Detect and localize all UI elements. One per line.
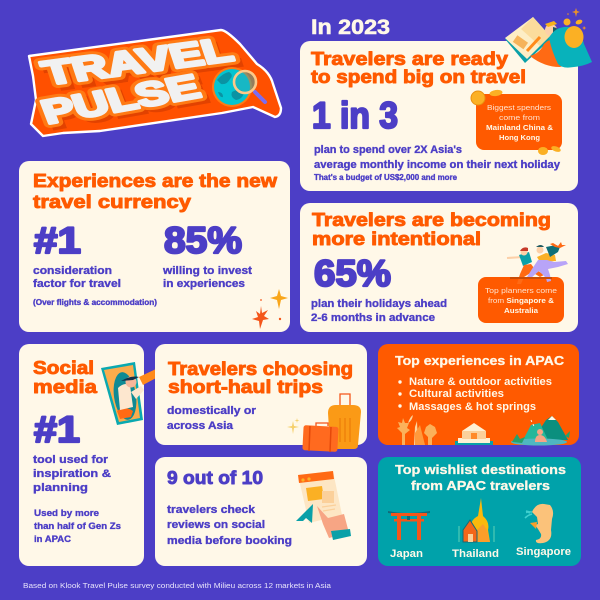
- text: domestically: domestically or: [167, 405, 257, 417]
- heading: short-haul: [168, 358, 353, 397]
- panel: social media: [19, 344, 144, 566]
- logo: Travel Pulse: PULSE: [36, 68, 205, 132]
- text: Gen Z usage: in APAC: [34, 534, 71, 545]
- heading: intentional: more intentional: [312, 228, 481, 249]
- heading: social media: Social: [33, 357, 94, 378]
- callout: biggest spenders: Hong Kong: [499, 133, 540, 142]
- footer source note: Based on Klook Travel Pulse survey conducted with Milieu across 12 markets in Asia: [23, 583, 331, 590]
- list: experiences: Cultural activities: [409, 388, 504, 400]
- panel: short-haul trips: [155, 344, 367, 452]
- heading: social media: [33, 357, 98, 397]
- panel: experiences: [19, 161, 290, 332]
- illustration: running travelers: [507, 242, 568, 284]
- callout: top planners: Australia: [504, 306, 539, 315]
- heading: intentional: [312, 209, 551, 249]
- icon: hot spring: [511, 416, 570, 446]
- panel: wishlist destinations: [378, 457, 581, 566]
- text: Gen Z usage: [34, 508, 121, 545]
- stat: 85%: in experiences: [163, 278, 245, 290]
- callout: biggest spenders: [471, 89, 562, 155]
- icon: suitcases: [287, 394, 361, 452]
- text: domestically: across Asia: [167, 420, 234, 432]
- stat: #1 consideration: (Over flights & accommodation): [33, 298, 157, 307]
- list: experiences: Nature & outdoor activities: [409, 376, 552, 388]
- stat: #1 consideration: consideration: [33, 265, 112, 277]
- logo: Travel Pulse: TRAVEL: [37, 31, 238, 93]
- callout: top planners: from Singapore &: [488, 296, 555, 305]
- stat: 85%: [162, 220, 252, 290]
- heading: experiences: [33, 170, 278, 212]
- text: reviews: media before booking: [167, 535, 292, 547]
- callout: biggest spenders: come from: [499, 113, 540, 122]
- list: experiences: Massages & hot springs: [409, 401, 536, 413]
- stat: 1 in 3: 1 in 3: [312, 95, 398, 136]
- stat: #1 tool: planning: [33, 482, 88, 494]
- label: Singapore: Singapore: [516, 546, 571, 558]
- illustration: traveler with book and backpack: [505, 8, 592, 68]
- icon: sparkles: [252, 289, 288, 329]
- label: Thailand: Thailand: [452, 548, 499, 560]
- stat: 65%: 65%: [314, 253, 391, 294]
- logo: Travel Pulse: PULSE: [42, 72, 211, 136]
- text: spend description: plan to spend over 2X Asia's: [314, 144, 462, 156]
- stat: #1 tool: inspiration &: [33, 468, 111, 480]
- callout: biggest spenders: Biggest spenders: [487, 103, 551, 112]
- illustration: phone with explorer: [101, 362, 159, 425]
- stat: #1 consideration: [33, 220, 157, 307]
- logo: Travel Pulse: PULSE: [36, 68, 205, 132]
- text: domestically: [167, 405, 257, 432]
- label: Japan: Japan: [390, 548, 423, 560]
- heading: wishlist: from APAC travelers: [411, 478, 550, 493]
- text: plan ahead: [311, 298, 447, 324]
- icon: torii gate, Japan: [388, 511, 430, 540]
- panel: top experiences: [378, 344, 579, 446]
- text: Gen Z usage: Used by more: [34, 508, 99, 519]
- panel: 9 out of 10: [155, 457, 367, 566]
- stat: #1 consideration: #1: [34, 220, 81, 261]
- stat: #1 consideration: factor for travel: [33, 278, 121, 290]
- text: spend description: average monthly income on their next holiday: [314, 159, 561, 171]
- logo: Travel Pulse: TRAVEL: [37, 31, 238, 93]
- heading: In 2023: In 2023: [311, 16, 390, 39]
- stat: 85%: willing to invest: [162, 265, 252, 277]
- stat: #1 tool: #1: [34, 409, 80, 450]
- heading: top experiences: Top experiences in APAC: [395, 353, 565, 368]
- panel: more intentional: [300, 203, 578, 332]
- list: experiences: [398, 376, 552, 413]
- heading: experiences: Experiences are the new: [33, 170, 278, 191]
- icon: merlion, Singapore: [525, 504, 553, 543]
- stat: 9 out of 10: 9 out of 10: [167, 467, 263, 488]
- heading: spend big: to spend big on travel: [311, 66, 526, 87]
- logo: Travel Pulse: [29, 30, 281, 136]
- callout: biggest spenders: Mainland China &: [486, 123, 554, 132]
- icon: autumn forest: [397, 415, 437, 445]
- icon: temple: [455, 423, 493, 445]
- heading: social media: media: [33, 376, 98, 397]
- text: Gen Z usage: than half of Gen Zs: [34, 521, 121, 532]
- stat: #1 tool: [33, 409, 111, 494]
- heading: experiences: travel currency: [33, 191, 192, 212]
- icon: hand on review page: [296, 471, 351, 540]
- stat: 85%: 85%: [164, 220, 242, 261]
- text: spend description: [314, 144, 561, 182]
- icon: wat temple, Thailand: [459, 498, 494, 542]
- text: reviews: travelers check: [167, 504, 256, 516]
- callout: top planners: [478, 277, 564, 323]
- panel: ready to spend: [300, 41, 578, 191]
- heading: short-haul: short-haul trips: [168, 376, 323, 397]
- heading: spend big: Travelers are ready: [311, 48, 509, 69]
- callout: top planners: Top planners come: [485, 286, 557, 295]
- stat: #1 tool: tool used for: [33, 454, 109, 466]
- text: reviews: [167, 504, 292, 547]
- heading: spend big: [311, 48, 526, 87]
- heading: wishlist: [395, 462, 566, 493]
- text: reviews: reviews on social: [167, 519, 265, 531]
- heading: wishlist: Top wishlist destinations: [395, 462, 566, 477]
- text: plan ahead: plan their holidays ahead: [311, 298, 447, 310]
- text: plan ahead: 2-6 months in advance: [311, 312, 435, 324]
- logo: Travel Pulse: TRAVEL: [43, 36, 244, 97]
- heading: intentional: Travelers are becoming: [312, 209, 551, 230]
- text: spend description: That's a budget of US$2,000 and more: [314, 173, 458, 182]
- heading: short-haul: Travelers choosing: [168, 358, 353, 379]
